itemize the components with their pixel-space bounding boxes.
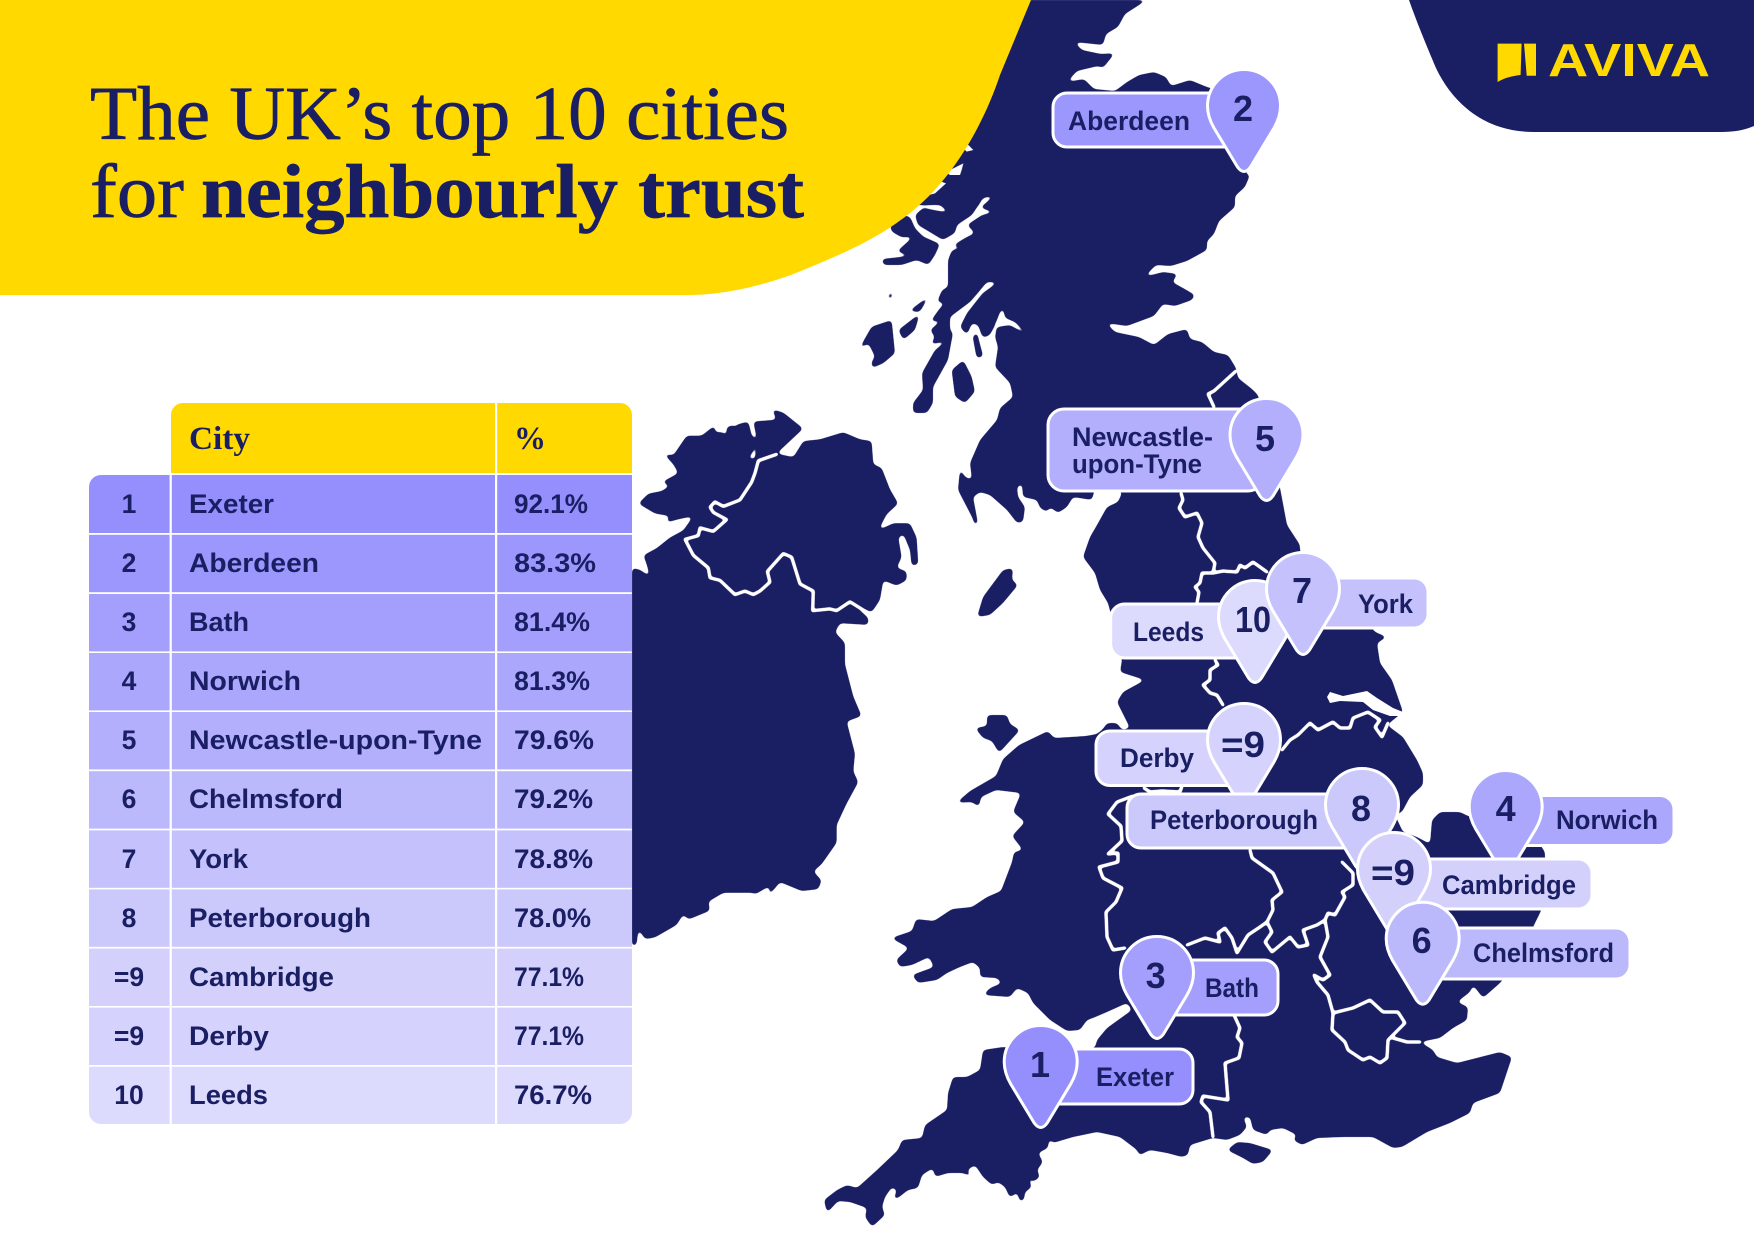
land: Isle of Man <box>977 568 1018 617</box>
marker: Aberdeen 2: Aberdeen <box>1068 106 1190 136</box>
row 6: 79.2% <box>514 784 593 814</box>
row 9: =9 <box>114 962 144 992</box>
table header: % <box>514 421 546 457</box>
row 11: 76.7% <box>514 1080 592 1110</box>
row 11: Leeds <box>189 1080 268 1110</box>
ranking table <box>89 403 632 1124</box>
row 2: 83.3% <box>514 548 596 578</box>
row 5: Newcastle-upon-Tyne <box>189 725 482 755</box>
marker: Newcastle-upon-Tyne 5 <box>1048 398 1303 500</box>
table header: City <box>189 421 250 457</box>
marker: Chelmsford 6: 6 <box>1412 920 1432 961</box>
national and regional borders <box>685 371 1420 1137</box>
land: Great Britain <box>824 0 1545 1227</box>
marker: Chelmsford 6: Chelmsford <box>1473 938 1614 968</box>
marker: Leeds 10: Leeds <box>1133 617 1204 647</box>
marker: Peterborough 8: 8 <box>1351 788 1371 829</box>
land: Isle of Wight <box>1227 1142 1273 1164</box>
row 5 <box>122 725 594 755</box>
row 1: 92.1% <box>514 489 588 519</box>
row 6: Chelmsford <box>189 784 343 814</box>
marker: Exeter 1: 1 <box>1030 1044 1050 1085</box>
marker: Chelmsford 6 <box>1386 902 1630 1004</box>
row 7: 7 <box>122 844 136 874</box>
row 8: Peterborough <box>189 903 371 933</box>
row 10: Derby <box>189 1021 269 1051</box>
logo icon <box>1498 44 1536 82</box>
logo tab <box>1409 0 1754 132</box>
Aviva logo <box>1498 34 1710 86</box>
row 3: 3 <box>122 607 136 637</box>
marker: York 7: 7 <box>1292 570 1312 611</box>
row 8 <box>122 903 591 933</box>
row 8: 78.0% <box>514 903 591 933</box>
land: Ireland <box>632 409 918 947</box>
map of the UK and Ireland <box>632 0 1545 1227</box>
row 3: Bath <box>189 607 249 637</box>
table header <box>171 403 632 473</box>
title line 2 bold: neighbourly trust <box>201 150 804 234</box>
title line 2 regular: for <box>90 150 184 234</box>
logo wordmark: AVIVA <box>1548 34 1710 86</box>
marker: Peterborough 8 <box>1127 768 1398 870</box>
row 11 <box>114 1080 592 1110</box>
row 1 <box>122 489 588 519</box>
row 1: Exeter <box>189 489 274 519</box>
marker: Leeds 10: 10 <box>1235 599 1271 640</box>
marker: Peterborough 8: Peterborough <box>1150 805 1318 835</box>
marker: Newcastle-upon-Tyne 5: 5 <box>1255 418 1275 459</box>
marker: Leeds 10 <box>1111 580 1292 682</box>
marker: Norwich 4: 4 <box>1496 788 1516 829</box>
row 4: 81.3% <box>514 666 590 696</box>
marker: Cambridge =9 <box>1358 832 1592 934</box>
row 5: 79.6% <box>514 725 594 755</box>
row 1: 1 <box>122 489 136 519</box>
marker: Derby =9 <box>1096 704 1280 806</box>
row 2: 2 <box>122 548 136 578</box>
title banner <box>0 0 1031 295</box>
marker: Derby =9: =9 <box>1221 724 1265 765</box>
land: Anglesey <box>975 715 1020 753</box>
title <box>90 72 804 234</box>
marker: Aberdeen 2 <box>1053 70 1280 172</box>
marker: York 7: York <box>1358 589 1413 619</box>
row 2 <box>122 548 596 578</box>
row 6 <box>122 784 593 814</box>
row 11: 10 <box>114 1080 144 1110</box>
row 7: York <box>189 844 248 874</box>
land masses <box>632 0 1545 1227</box>
marker: Derby =9: Derby <box>1120 743 1194 773</box>
marker: Norwich 4 <box>1469 770 1674 872</box>
marker: Cambridge =9: =9 <box>1371 852 1415 893</box>
row 4 <box>122 666 590 696</box>
marker: Exeter 1 <box>1004 1026 1193 1128</box>
land: Scottish islands <box>858 213 983 403</box>
row 4: 4 <box>122 666 137 696</box>
marker: Aberdeen 2: 2 <box>1233 88 1253 129</box>
row 9 <box>114 962 584 992</box>
row 9: Cambridge <box>189 962 334 992</box>
title line 1: The UK’s top 10 cities <box>90 72 789 156</box>
row 7: 78.8% <box>514 844 593 874</box>
row 5: 5 <box>122 725 136 755</box>
marker: Cambridge =9: Cambridge <box>1442 870 1576 900</box>
marker: Newcastle-upon-Tyne 5: upon-Tyne <box>1072 449 1202 479</box>
marker: Newcastle-upon-Tyne 5: Newcastle- <box>1072 422 1213 452</box>
row 3 <box>122 607 590 637</box>
row 10 <box>114 1021 584 1051</box>
estuaries and sea lochs <box>923 145 1403 716</box>
row 4: Norwich <box>189 666 301 696</box>
row 2: Aberdeen <box>189 548 319 578</box>
row 9: 77.1% <box>514 962 584 992</box>
row 10: 77.1% <box>514 1021 584 1051</box>
table row backgrounds <box>89 475 632 1124</box>
Northern Ireland border <box>685 454 870 614</box>
marker: Norwich 4: Norwich <box>1556 805 1658 835</box>
marker: Exeter 1: Exeter <box>1096 1062 1174 1092</box>
marker: Bath 3 <box>1120 936 1278 1038</box>
row 10: =9 <box>114 1021 144 1051</box>
row 6: 6 <box>122 784 136 814</box>
row 8: 8 <box>122 903 136 933</box>
row 7 <box>122 844 593 874</box>
marker: York 7 <box>1266 552 1428 654</box>
marker: Bath 3: 3 <box>1146 955 1166 996</box>
row 3: 81.4% <box>514 607 590 637</box>
marker: Bath 3: Bath <box>1205 973 1259 1003</box>
